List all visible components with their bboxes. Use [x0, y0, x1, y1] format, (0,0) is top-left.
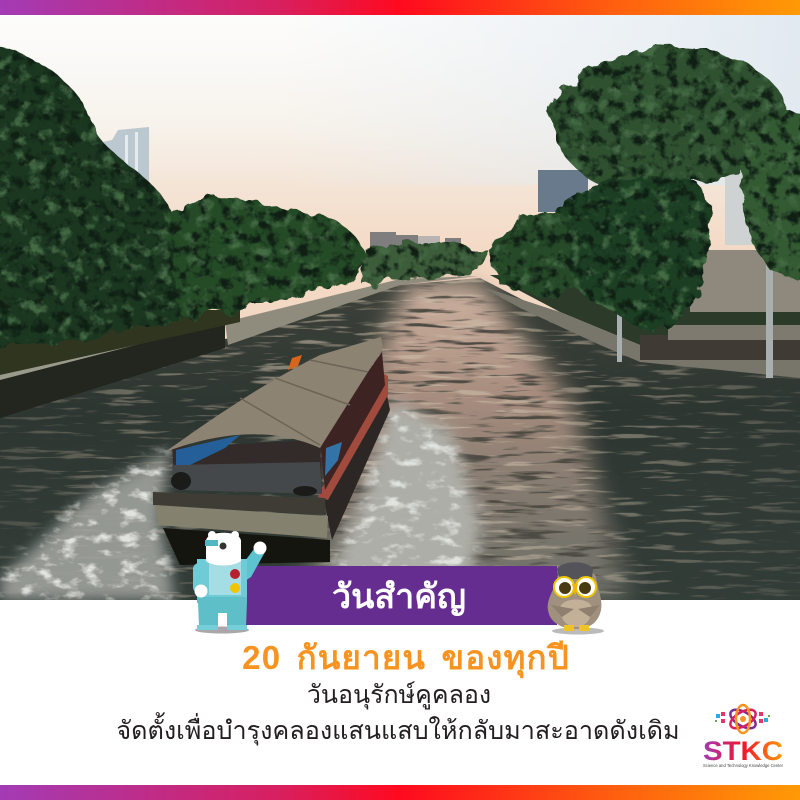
boat shadow hull	[163, 528, 330, 565]
sky	[0, 15, 800, 415]
water	[0, 270, 800, 600]
boat	[153, 337, 390, 565]
owl mascot	[548, 562, 604, 634]
photo: boat on Saen Saep canal	[0, 15, 800, 600]
left canal bank	[0, 276, 478, 418]
right canal bank	[480, 205, 800, 378]
STKC logo: Science and Technology Knowledge Center	[703, 763, 783, 768]
STKC logo	[703, 704, 783, 768]
polar bear mascot	[193, 531, 266, 634]
description: จัดตั้งเพื่อบำรุงคลองแสนแสบให้กลับมาสะอาดดังเดิม	[116, 717, 680, 745]
red hull stripe	[318, 372, 388, 500]
distant buildings	[88, 127, 755, 253]
STKC logo: STKC	[703, 736, 783, 766]
top gradient bar	[0, 0, 800, 15]
banner heading: วันสำคัญ	[332, 578, 466, 616]
purple banner	[245, 566, 557, 625]
cabin	[172, 440, 322, 492]
roof	[165, 337, 383, 452]
bottom gradient bar	[0, 785, 800, 800]
blue tarps	[176, 435, 240, 465]
passenger in orange vest	[288, 355, 302, 370]
right trees	[490, 47, 800, 335]
left trees	[0, 40, 490, 345]
date heading: 20 กันยายน ของทุกปี	[242, 639, 570, 676]
deck and stern	[153, 492, 326, 515]
subtitle: วันอนุรักษ์คูคลอง	[307, 681, 491, 709]
